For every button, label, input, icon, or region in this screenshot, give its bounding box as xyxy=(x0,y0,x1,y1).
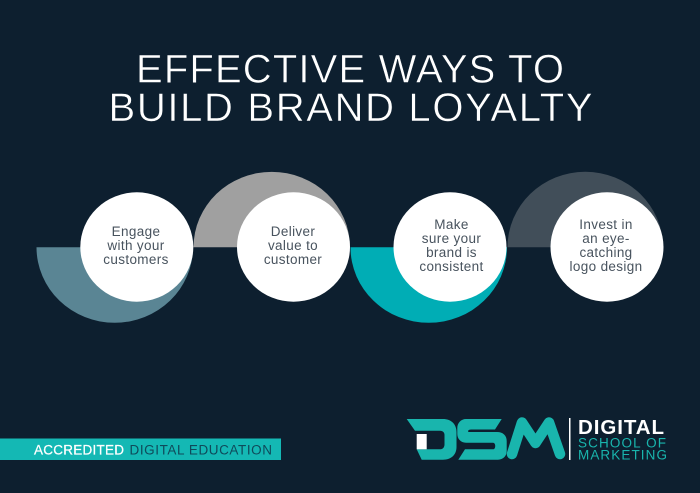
logo divider xyxy=(569,418,570,460)
logo wordmark: DIGITAL xyxy=(578,416,664,439)
step 4: logo design: an eye- xyxy=(582,231,630,246)
step 2: deliver: Deliver xyxy=(271,224,315,239)
step 3: consistent xyxy=(394,192,506,302)
step 4: logo design: catching xyxy=(579,245,633,260)
step 1: engage xyxy=(80,192,193,302)
step 2: deliver: value to xyxy=(268,238,318,253)
half circle: step 4 xyxy=(508,172,663,247)
step 4: logo design: logo design xyxy=(570,259,642,274)
step 1: engage: customers xyxy=(103,252,169,267)
step 3: consistent: Make xyxy=(434,217,469,232)
logo wordmark: SCHOOL OF xyxy=(578,436,666,450)
logo wordmark xyxy=(578,416,667,462)
banner text: accredited: ACCREDITED xyxy=(34,442,124,458)
step 1: engage: with your xyxy=(106,238,165,253)
banner text: digital education: DIGITAL EDUCATION xyxy=(130,442,272,458)
title: BUILD BRAND LOYALTY xyxy=(108,86,592,130)
half circle: step 3 xyxy=(350,247,507,323)
step 4: logo design: Invest in xyxy=(579,217,633,232)
step 1: engage: Engage xyxy=(112,224,160,239)
logo mark: DSM letters xyxy=(407,419,560,460)
step 4: logo design xyxy=(550,192,664,302)
step 2: deliver: customer xyxy=(264,252,322,267)
half circle: step 1 xyxy=(36,247,193,323)
step 3: consistent: consistent xyxy=(419,259,484,274)
step 3: consistent: sure your xyxy=(422,231,481,246)
title xyxy=(108,48,592,130)
half circle: step 2 xyxy=(194,172,350,247)
logo wordmark: MARKETING xyxy=(578,448,667,462)
title: EFFECTIVE WAYS TO xyxy=(136,48,564,92)
step 3: consistent: brand is xyxy=(426,245,477,260)
step 2: deliver xyxy=(237,192,350,302)
